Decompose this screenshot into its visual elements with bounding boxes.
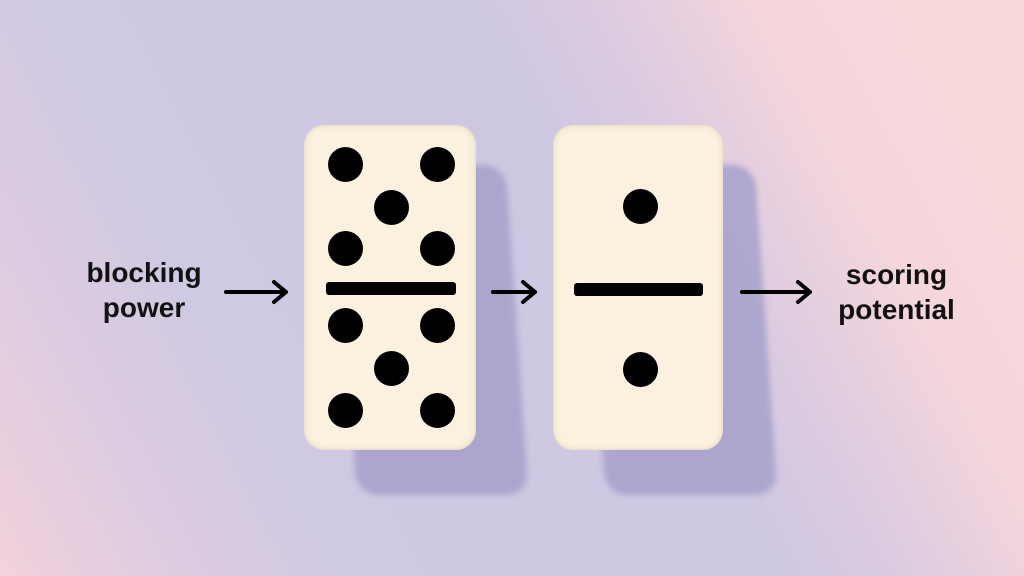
label: scoring potential: potential bbox=[838, 294, 955, 325]
arrow 3 bbox=[740, 280, 812, 304]
arrow 1 bbox=[224, 280, 288, 304]
label: blocking power bbox=[86, 257, 202, 323]
label: scoring potential: scoring bbox=[846, 259, 947, 290]
arrow 2 bbox=[491, 280, 538, 304]
domino: 5-5 bbox=[304, 125, 476, 450]
domino: 1-1 bbox=[553, 125, 723, 450]
label: blocking power: blocking bbox=[86, 257, 202, 288]
label: blocking power: power bbox=[103, 292, 185, 323]
label: scoring potential bbox=[838, 259, 955, 325]
